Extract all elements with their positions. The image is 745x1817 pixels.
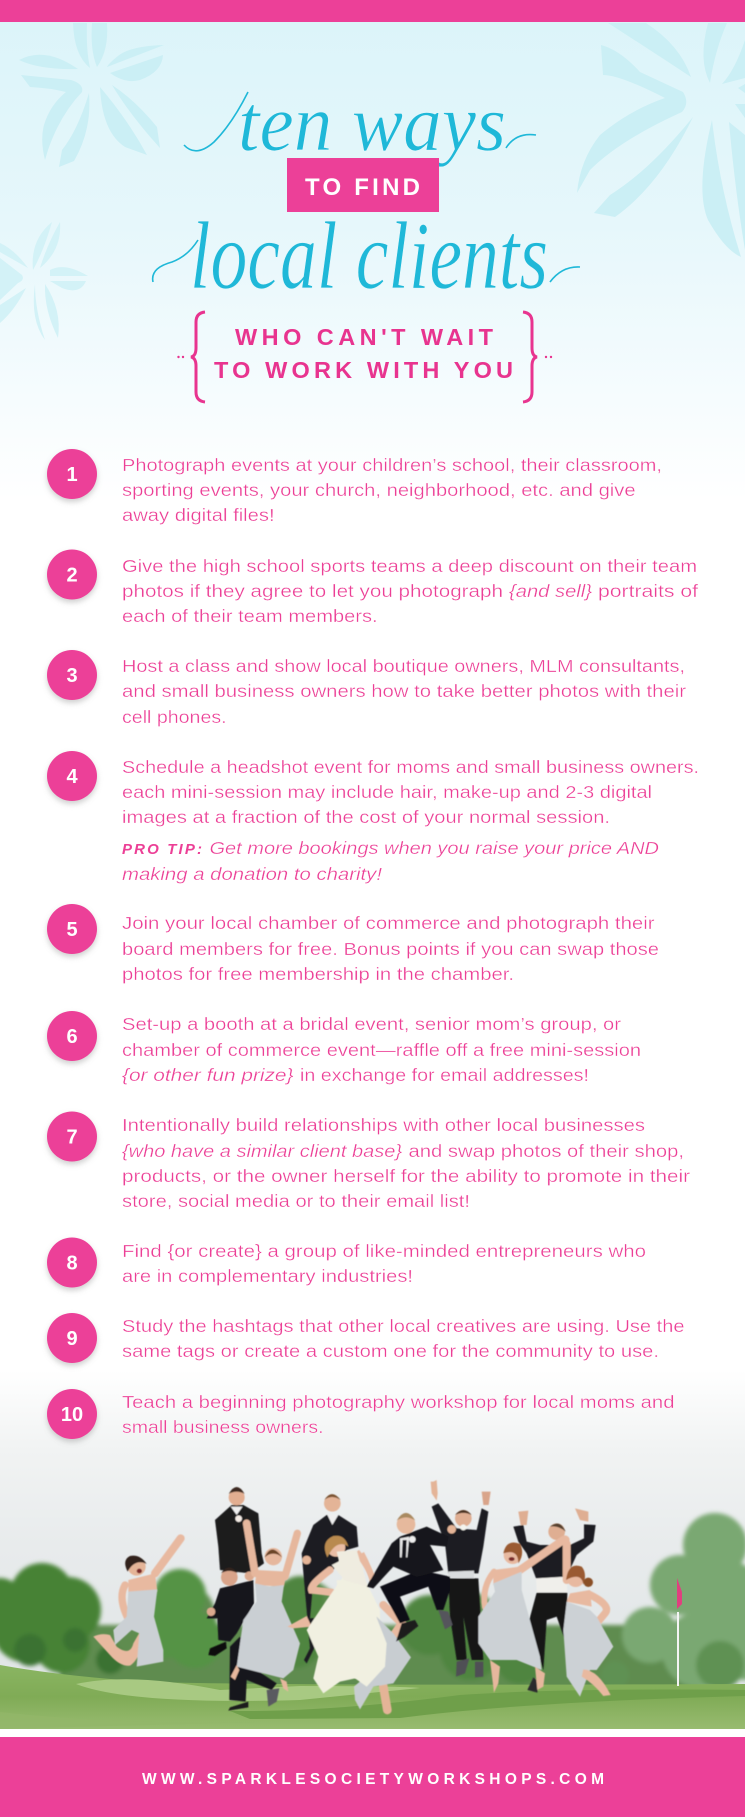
text 1: away digital files! <box>122 505 275 525</box>
title: ten ways: ten ways <box>238 80 506 168</box>
text 7: {who have a similar client base} <box>122 1141 402 1161</box>
pro tip <box>122 838 659 884</box>
text 8: are in complementary industries! <box>122 1266 413 1286</box>
badge 9 <box>47 1313 97 1363</box>
item 9 <box>47 1313 684 1363</box>
photo: wedding party jumping (right half) <box>337 1480 613 1710</box>
item 8 <box>47 1238 646 1288</box>
badge 4 <box>47 751 97 801</box>
badge 7: 7 <box>66 1126 78 1148</box>
text 2: Give the high school sports teams a deep discount on their team <box>122 556 697 576</box>
pro tip: making a donation to charity! <box>122 864 382 884</box>
text 7: and swap photos of their shop, <box>408 1141 684 1161</box>
text 10 <box>122 1392 674 1437</box>
text 6 <box>122 1014 641 1085</box>
left brace <box>191 312 205 402</box>
item 7 <box>47 1112 690 1211</box>
text 3: Host a class and show local boutique owners, MLM consultants, <box>122 656 685 676</box>
text 8 <box>122 1241 646 1286</box>
flower decoration: top left <box>19 23 164 167</box>
text 9 <box>122 1316 684 1361</box>
pro tip: Get more bookings when you raise your price AND <box>210 838 659 858</box>
flower decoration: top right <box>577 23 745 257</box>
text 2 <box>122 556 698 626</box>
item 6 <box>47 1011 641 1085</box>
text 2: {and sell} <box>509 581 592 601</box>
bride <box>287 1536 380 1693</box>
text 3: cell phones. <box>122 707 227 727</box>
footer <box>0 1737 745 1817</box>
text 6: chamber of commerce event—raffle off a free mini-session <box>122 1040 641 1060</box>
badge 10: 10 <box>61 1404 83 1426</box>
badge 2 <box>47 550 97 600</box>
item 5 <box>47 904 659 984</box>
groom <box>367 1513 456 1642</box>
text 7: Intentionally build relationships with other local businesses <box>122 1115 645 1135</box>
bridesmaid center <box>231 1523 300 1692</box>
top pink bar <box>0 0 745 22</box>
groomsman top <box>215 1487 264 1573</box>
pro tip: PRO TIP: <box>122 841 202 858</box>
photo: wedding party jumping (left half) <box>93 1487 380 1711</box>
photo: trees <box>0 1513 745 1690</box>
text 1: sporting events, your church, neighborhood, etc. and give <box>122 480 636 500</box>
photo: flag <box>677 1578 682 1686</box>
bridesmaid behind bride <box>354 1605 411 1710</box>
title: local clients: local clients <box>190 202 548 309</box>
badge 5 <box>47 904 97 954</box>
text 5: photos for free membership in the chamber. <box>122 964 514 984</box>
text 9: Study the hashtags that other local creatives are using. Use the <box>122 1316 684 1336</box>
badge 1 <box>47 449 97 499</box>
badge 6: 6 <box>66 1026 78 1048</box>
item 4 <box>47 751 699 884</box>
text 3: and small business owners how to take better photos with their <box>122 681 686 701</box>
text 6: in exchange for email addresses! <box>300 1065 589 1085</box>
text 2: each of their team members. <box>122 606 378 626</box>
text 2: portraits of <box>598 581 698 601</box>
badge 1: 1 <box>66 464 78 486</box>
item 1 <box>47 449 662 525</box>
badge 8 <box>47 1238 97 1288</box>
photo sky <box>0 1370 745 1690</box>
text 10: small business owners. <box>122 1417 324 1437</box>
bridesmaid left <box>93 1538 181 1667</box>
text 5: board members for free. Bonus points if you can swap those <box>122 939 659 959</box>
subtitle text line 1: WHO CAN'T WAIT <box>235 324 494 350</box>
text 4: each mini-session may include hair, make-up and 2-3 digital <box>122 782 652 802</box>
text 7 <box>122 1115 690 1211</box>
bride dress <box>337 1580 387 1687</box>
text 3 <box>122 656 686 727</box>
text 5: Join your local chamber of commerce and photograph their <box>122 913 655 933</box>
text 7: store, social media or to their email list! <box>122 1191 470 1211</box>
text 9: same tags or create a custom one for the community to use. <box>122 1341 659 1361</box>
white strip below photo <box>0 1729 745 1737</box>
groomsman back right <box>302 1494 358 1663</box>
standing groomsman legs <box>229 1637 277 1702</box>
badge 4: 4 <box>66 766 78 788</box>
bridesmaid four <box>560 1535 613 1697</box>
badge 2: 2 <box>66 564 78 586</box>
groomsman right <box>513 1508 596 1693</box>
text 1: Photograph events at your children’s school, their classroom, <box>122 455 662 475</box>
crouching groomsman <box>207 1567 254 1656</box>
flower decoration: left middle <box>0 222 88 340</box>
badge 7 <box>47 1112 97 1162</box>
subtitle with braces <box>177 312 552 402</box>
item 3 <box>47 650 686 727</box>
badge 5: 5 <box>66 919 78 941</box>
badge 3: 3 <box>66 665 78 687</box>
dots <box>177 356 552 358</box>
text 4 <box>122 757 699 827</box>
item 10 <box>47 1389 674 1439</box>
item 2 <box>47 550 698 626</box>
title box: to find: TO FIND <box>305 174 420 201</box>
text 7: products, or the owner herself for the ability to promote in their <box>122 1166 690 1186</box>
text 10: Teach a beginning photography workshop for local moms and <box>122 1392 674 1412</box>
badge 3 <box>47 650 97 700</box>
text 4: Schedule a headshot event for moms and small business owners. <box>122 757 699 777</box>
badge 8: 8 <box>66 1252 78 1274</box>
text 5 <box>122 913 659 984</box>
subtitle text line 2: TO WORK WITH YOU <box>214 357 513 383</box>
groomsman arms up <box>431 1480 491 1677</box>
badge 9: 9 <box>66 1328 78 1350</box>
right brace <box>523 312 537 402</box>
text 2: photos if they agree to let you photograph <box>122 581 503 601</box>
title box: to find <box>287 158 439 212</box>
badge 10 <box>47 1389 97 1439</box>
text 8: Find {or create} a group of like-minded entrepreneurs who <box>122 1241 646 1261</box>
badge 6 <box>47 1011 97 1061</box>
footer url: WWW.SPARKLESOCIETYWORKSHOPS.COM <box>142 1771 604 1788</box>
text 6: {or other fun prize} <box>122 1065 294 1085</box>
text 1 <box>122 455 662 525</box>
photo: grass <box>0 1665 745 1729</box>
text 4: images at a fraction of the cost of your normal session. <box>122 807 610 827</box>
text 6: Set-up a booth at a bridal event, senior mom’s group, or <box>122 1014 621 1034</box>
background gradient <box>0 0 745 500</box>
bridesmaid three <box>478 1540 563 1693</box>
